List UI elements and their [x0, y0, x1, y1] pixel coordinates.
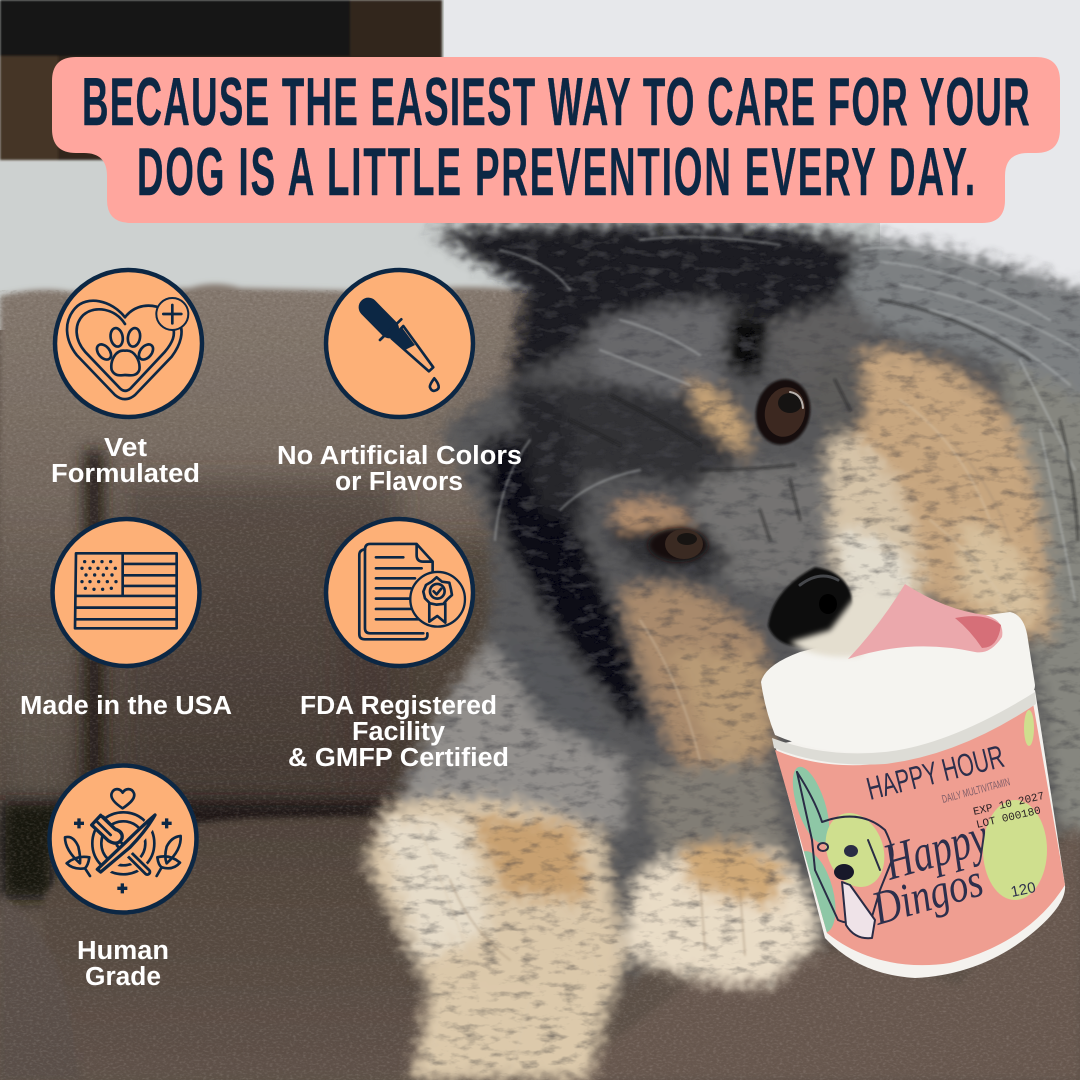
circle: [52, 519, 200, 666]
icon: american flag: [75, 553, 177, 628]
couch back: [0, 284, 620, 860]
badge: human grade: [50, 766, 196, 991]
label: Facility: [352, 718, 446, 746]
badge: vet formulated: [51, 270, 202, 488]
jar body bottom band: [775, 690, 1065, 978]
dark wooden frame: [0, 0, 442, 160]
fur: grey forehead: [590, 307, 725, 395]
label: FDA Registered: [300, 692, 497, 720]
HAPPY HOUR title: HAPPY HOUR: [863, 738, 1008, 807]
wall: [0, 0, 1080, 330]
fur: white muzzle: [835, 530, 910, 640]
tongue body: [848, 584, 1002, 659]
fur: grey upper right: [845, 240, 1080, 440]
fur: eye socket grey: [812, 355, 868, 440]
couch weave texture: [0, 290, 1080, 1080]
Happy script: Happy: [877, 808, 995, 892]
label: Grade: [85, 963, 161, 991]
fur: tan left brow: [612, 502, 695, 531]
label: Human: [77, 937, 169, 965]
circle: [326, 270, 473, 417]
DAILY MULTIVITAMIN subtitle: DAILY MULTIVITAMIN: [941, 776, 1011, 806]
fur strands: [420, 237, 1078, 1075]
label: [77, 937, 169, 991]
bright window area: [444, 0, 1080, 320]
label: [288, 692, 509, 772]
label: [51, 434, 200, 488]
fur: front leg: [412, 985, 612, 1080]
fur: tan brow: [685, 380, 748, 456]
fur: dark around left eye: [600, 525, 735, 580]
product jar: [761, 612, 1065, 978]
fur: dark crown: [440, 226, 865, 380]
fur: grey right side: [1000, 360, 1080, 830]
fur: tan ruff: [622, 586, 775, 780]
expiry and lot stamp: EXP 10 2027: [972, 791, 1046, 819]
nose: [768, 567, 853, 647]
dog silhouette: [362, 223, 1080, 1080]
fur: dark eye band: [520, 382, 745, 490]
fur: black forehead patch: [725, 312, 770, 382]
white chin over lid: [790, 590, 900, 657]
headline banner: [52, 57, 1060, 223]
badge: fda registered: [288, 519, 509, 772]
couch shadows and cushion folds: [0, 480, 510, 840]
badge: no artificial colors: [277, 270, 522, 496]
icon: plate with fork and knife: [65, 789, 181, 893]
circle: [55, 270, 202, 417]
label: Formulated: [51, 460, 200, 488]
Dingos script: Dingos: [866, 854, 989, 936]
label: & GMFP Certified: [288, 744, 509, 772]
lid shading: [772, 692, 1036, 765]
circle: [50, 766, 196, 912]
fur: grey chest: [400, 640, 625, 830]
banner shape: [52, 57, 1060, 223]
serving count: 120: [1009, 879, 1037, 901]
circle: [326, 519, 473, 666]
fur: dark ruff left: [505, 380, 590, 520]
jar label: [775, 703, 1065, 965]
eye right: [750, 374, 816, 450]
expiry and lot stamp: LOT 000180: [975, 805, 1042, 832]
fur: merle muzzle: [690, 466, 830, 590]
label: Vet: [104, 434, 148, 462]
tongue tip: [955, 616, 1001, 648]
icon: document with rosette: [359, 544, 465, 639]
headline line 1: BECAUSE THE EASIEST WAY TO CARE FOR YOUR: [82, 64, 1030, 140]
fur: big tan cheek: [855, 351, 1050, 640]
fur: cream cheek: [822, 430, 925, 620]
green blobs: [785, 710, 1047, 937]
label: or Flavors: [335, 468, 463, 496]
fur: front paw: [622, 844, 816, 986]
fur: cream chest: [365, 799, 625, 1000]
label: [277, 442, 522, 496]
illustrated dog line art: [797, 772, 893, 938]
tongue: [848, 584, 1002, 659]
icon: heart with paw and plus: [67, 298, 188, 399]
eye left: [648, 528, 708, 562]
badge: made in the usa: [20, 519, 232, 720]
label artwork: [785, 710, 1047, 938]
headline line 2: DOG IS A LITTLE PREVENTION EVERY DAY.: [137, 134, 975, 210]
jar lid: [761, 612, 1035, 752]
dog: [362, 223, 1080, 1080]
label: Made in the USA: [20, 692, 232, 720]
icon: dropper: [368, 307, 439, 391]
label: No Artificial Colors: [277, 442, 522, 470]
couch seat cushion: [0, 815, 1080, 1080]
fur: black neck stripe: [480, 436, 650, 730]
